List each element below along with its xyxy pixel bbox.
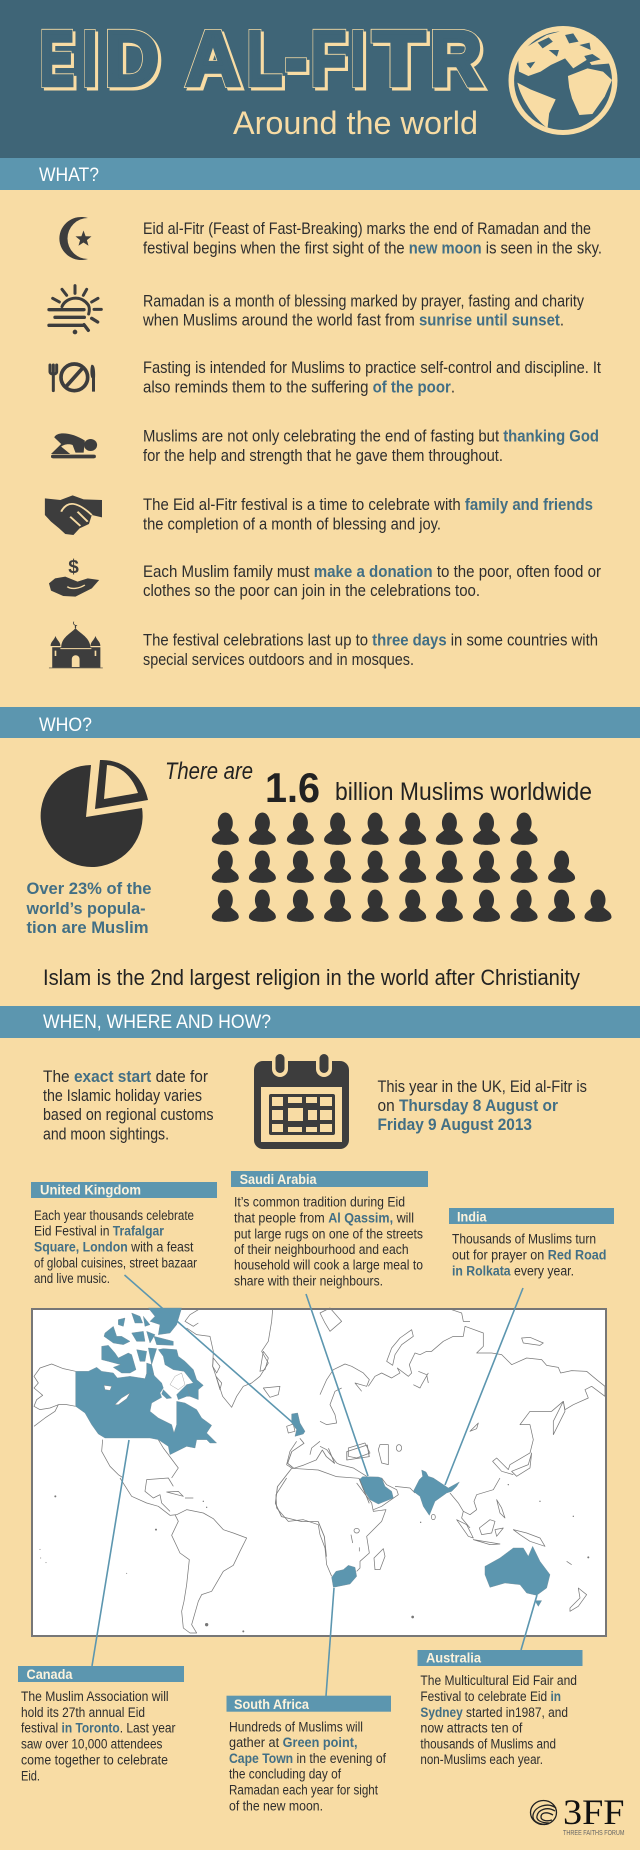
stat: share of world population: tion are Muslim bbox=[26, 918, 148, 937]
title: F bbox=[314, 18, 348, 104]
logo: three faiths forum bbox=[530, 1792, 625, 1837]
title: I bbox=[351, 16, 365, 102]
map: south america bbox=[39, 1478, 320, 1633]
text: moon bbox=[143, 220, 602, 258]
callout: canada: Canada bbox=[26, 1666, 73, 1682]
text: thanking bbox=[143, 428, 599, 465]
callout: united kingdom: Eid Festival in Trafalgar bbox=[34, 1224, 165, 1239]
callout: saudi arabia: Saudi Arabia bbox=[240, 1171, 317, 1187]
callout: south africa: Ramadan each year for sight bbox=[229, 1783, 378, 1798]
callout: india: Thousands of Muslims turn bbox=[452, 1232, 596, 1247]
title: R bbox=[430, 16, 482, 102]
text: fasting bbox=[143, 359, 601, 396]
title: T bbox=[376, 18, 428, 104]
callout: australia bbox=[418, 1650, 582, 1767]
callout: canada: festival in Toronto. Last year bbox=[21, 1721, 176, 1736]
text: exact start: the Islamic holiday varies bbox=[43, 1086, 202, 1105]
text: ramadan: Ramadan is a month of blessing marked by prayer, fasting and charity bbox=[143, 292, 585, 310]
map: europe and asia bbox=[320, 1308, 605, 1476]
callout: australia: Festival to celebrate Eid in bbox=[420, 1689, 561, 1704]
title: E bbox=[40, 16, 74, 102]
title: D bbox=[105, 16, 159, 102]
title: I bbox=[351, 16, 365, 102]
callout: canada bbox=[18, 1666, 184, 1783]
header panel bbox=[0, 0, 640, 158]
pie chart bbox=[41, 760, 148, 867]
panel: what list bbox=[45, 217, 602, 669]
callout: canada: hold its 27th annual Eid bbox=[21, 1705, 145, 1720]
text: thanking: Muslims are not only celebrating the end of fasting but thanking God bbox=[143, 428, 599, 446]
title: L bbox=[250, 18, 284, 104]
icon: plate and cutlery bbox=[50, 364, 95, 392]
callout: saudi arabia: of their neighbourhood and each bbox=[234, 1242, 409, 1257]
text: donation: clothes so the poor can join in the celebrations too. bbox=[143, 582, 480, 600]
text: exact start bbox=[43, 1067, 214, 1144]
callout: canada: Eid. bbox=[21, 1768, 40, 1783]
map: africa asia oceania bbox=[320, 1470, 589, 1618]
title: R bbox=[432, 18, 484, 104]
section bar: who: WHO? bbox=[39, 715, 92, 736]
callout: south africa: the concluding day of bbox=[229, 1767, 341, 1782]
callout: south africa: gather at Green point, bbox=[229, 1735, 358, 1750]
text: family: the completion of a month of blessing and joy. bbox=[143, 516, 441, 534]
arrow: south africa leader bbox=[326, 1588, 334, 1696]
section bar: when where how: WHEN, WHERE AND HOW? bbox=[43, 1012, 271, 1033]
callout: india: in Rolkata every year. bbox=[452, 1263, 574, 1278]
title: - bbox=[285, 16, 307, 102]
callout: saudi arabia: put large rugs on one of the streets bbox=[234, 1226, 423, 1241]
text: donation: Each Muslim family must make a donation to the poor, often food or bbox=[143, 563, 601, 581]
panel: who bbox=[26, 758, 612, 990]
callout: australia: Sydney started in1987, and bbox=[420, 1705, 568, 1720]
title: - bbox=[285, 16, 307, 102]
stat: 1.6 billion: billion Muslims worldwide bbox=[335, 778, 592, 806]
callout: australia: Australia bbox=[426, 1650, 481, 1666]
icon: giving hand bbox=[49, 557, 99, 597]
callout: saudi arabia: that people from Al Qassim, will bbox=[234, 1211, 414, 1226]
text: this year: This year in the UK, Eid al-Fitr is bbox=[378, 1077, 587, 1096]
icon: mosque bbox=[49, 622, 103, 668]
title: T bbox=[373, 16, 425, 102]
title: F bbox=[311, 16, 346, 102]
text: family: The Eid al-Fitr festival is a time to celebrate with family and friends bbox=[143, 496, 593, 514]
title: E bbox=[40, 16, 74, 102]
callout: united kingdom: Square, London with a feast bbox=[34, 1239, 194, 1254]
icon: crescent and star bbox=[59, 217, 92, 260]
title: D bbox=[108, 18, 162, 104]
title: - bbox=[288, 18, 310, 104]
callout: australia: now attracts ten of bbox=[420, 1721, 523, 1736]
callout: canada: saw over 10,000 attendees bbox=[21, 1737, 163, 1752]
text: thanking: for the help and strength that he gave them throughout. bbox=[143, 447, 503, 465]
title: I bbox=[86, 18, 100, 104]
callout: australia: thousands of Muslims and bbox=[420, 1736, 556, 1751]
arrow: canada leader bbox=[92, 1440, 129, 1666]
stat: 1.6 billion bbox=[165, 758, 592, 811]
icon: giving hand: $ bbox=[68, 557, 79, 578]
text: exact start: The exact start date for bbox=[43, 1067, 208, 1086]
title: E bbox=[42, 18, 76, 104]
map: mediterranean coasts bbox=[275, 1438, 369, 1557]
arrow: india leader bbox=[445, 1288, 523, 1485]
title: A bbox=[186, 16, 240, 102]
callout: united kingdom bbox=[31, 1182, 217, 1286]
icon: person praying bbox=[51, 433, 97, 458]
icon: handshake bbox=[45, 495, 102, 535]
title: T bbox=[373, 16, 425, 102]
text: this year: on Thursday 8 August or bbox=[378, 1096, 558, 1115]
title: I bbox=[354, 18, 368, 104]
callout: canada: come together to celebrate bbox=[21, 1753, 168, 1768]
section bar: when where how bbox=[0, 1006, 640, 1038]
callout: south africa: South Africa bbox=[234, 1696, 309, 1712]
callout: united kingdom: United Kingdom bbox=[40, 1182, 141, 1198]
text: donation bbox=[143, 563, 601, 600]
callout: india bbox=[449, 1208, 614, 1278]
callout: saudi arabia: share with their neighbours. bbox=[234, 1274, 383, 1289]
section bar: what bbox=[0, 158, 640, 190]
callout: united kingdom: of global cuisines, street bazaar bbox=[34, 1255, 197, 1270]
title: L bbox=[247, 16, 282, 102]
callout: australia: non-Muslims each year. bbox=[420, 1752, 543, 1767]
stat: share of world population bbox=[26, 879, 151, 937]
pictogram: people bbox=[212, 812, 612, 922]
callout: saudi arabia: It’s common tradition during Eid bbox=[234, 1195, 405, 1210]
callout: united kingdom: Each year thousands celebrate bbox=[34, 1208, 194, 1223]
statement: second largest religion: Islam is the 2nd largest religion in the world after Christianity bbox=[43, 965, 580, 990]
title: A bbox=[188, 18, 242, 104]
stat: 1.6 billion: There are bbox=[165, 758, 253, 785]
logo: three faiths forum: 3FF bbox=[563, 1792, 624, 1832]
text: ramadan: when Muslims around the world fast from sunrise until sunset. bbox=[142, 312, 564, 330]
text: exact start: and moon sightings. bbox=[43, 1124, 169, 1144]
arrow: australia leader bbox=[521, 1595, 537, 1650]
section bar: who bbox=[0, 707, 640, 738]
text: this year bbox=[378, 1077, 587, 1134]
text: moon: festival begins when the first sight of the new moon is seen in the sky. bbox=[143, 240, 602, 258]
text: family bbox=[143, 496, 593, 534]
icon: sunrise bbox=[49, 286, 101, 334]
callout: india: India bbox=[457, 1209, 487, 1225]
icon: globe bbox=[508, 26, 618, 135]
callout: saudi arabia: household will cook a large meal to bbox=[234, 1258, 423, 1273]
arrow: saudi leader bbox=[306, 1294, 368, 1476]
text: three days bbox=[143, 632, 598, 669]
title: D bbox=[105, 16, 159, 102]
icon: swirl bbox=[530, 1800, 556, 1824]
text: three days: The festival celebrations last up to three days in some countries with bbox=[143, 632, 598, 650]
callout: south africa: of the new moon. bbox=[229, 1798, 323, 1813]
stat: share of world population: Over 23% of the bbox=[26, 879, 152, 898]
text: exact start: based on regional customs bbox=[43, 1105, 214, 1124]
callout: south africa: Cape Town in the evening of bbox=[229, 1751, 386, 1766]
callout: canada: The Muslim Association will bbox=[21, 1689, 169, 1704]
callout: australia: The Multicultural Eid Fair and bbox=[420, 1673, 577, 1688]
text: fasting: also reminds them to the suffering of the poor. bbox=[143, 378, 455, 396]
title: I bbox=[83, 16, 97, 102]
callout: united kingdom: and live music. bbox=[34, 1271, 110, 1286]
logo: three faiths forum: THREE FAITHS FORUM bbox=[563, 1830, 625, 1837]
title: F bbox=[311, 16, 346, 102]
arrow: uk leader bbox=[124, 1275, 295, 1425]
callout: south africa: Hundreds of Muslims will bbox=[229, 1719, 363, 1734]
text: ramadan bbox=[142, 292, 585, 330]
title bbox=[40, 16, 484, 104]
map: north america and greenland bbox=[34, 1308, 320, 1478]
callout: india: out for prayer on Red Road bbox=[452, 1247, 606, 1262]
title: A bbox=[186, 16, 240, 102]
title: I bbox=[83, 16, 97, 102]
title: R bbox=[430, 16, 482, 102]
text: this year: Friday 9 August 2013 bbox=[378, 1115, 532, 1134]
title: L bbox=[247, 16, 282, 102]
stat: share of world population: world’s popula- bbox=[26, 899, 145, 918]
icon: calendar bbox=[254, 1052, 349, 1149]
section bar: what: WHAT? bbox=[39, 165, 99, 186]
stat: 1.6 billion: 1.6 bbox=[265, 764, 320, 811]
subtitle: Around the world bbox=[233, 105, 478, 141]
text: three days: special services outdoors and in mosques. bbox=[143, 651, 414, 669]
callout: south africa bbox=[226, 1696, 391, 1813]
callout: saudi arabia bbox=[231, 1171, 428, 1289]
world map bbox=[32, 1308, 606, 1636]
